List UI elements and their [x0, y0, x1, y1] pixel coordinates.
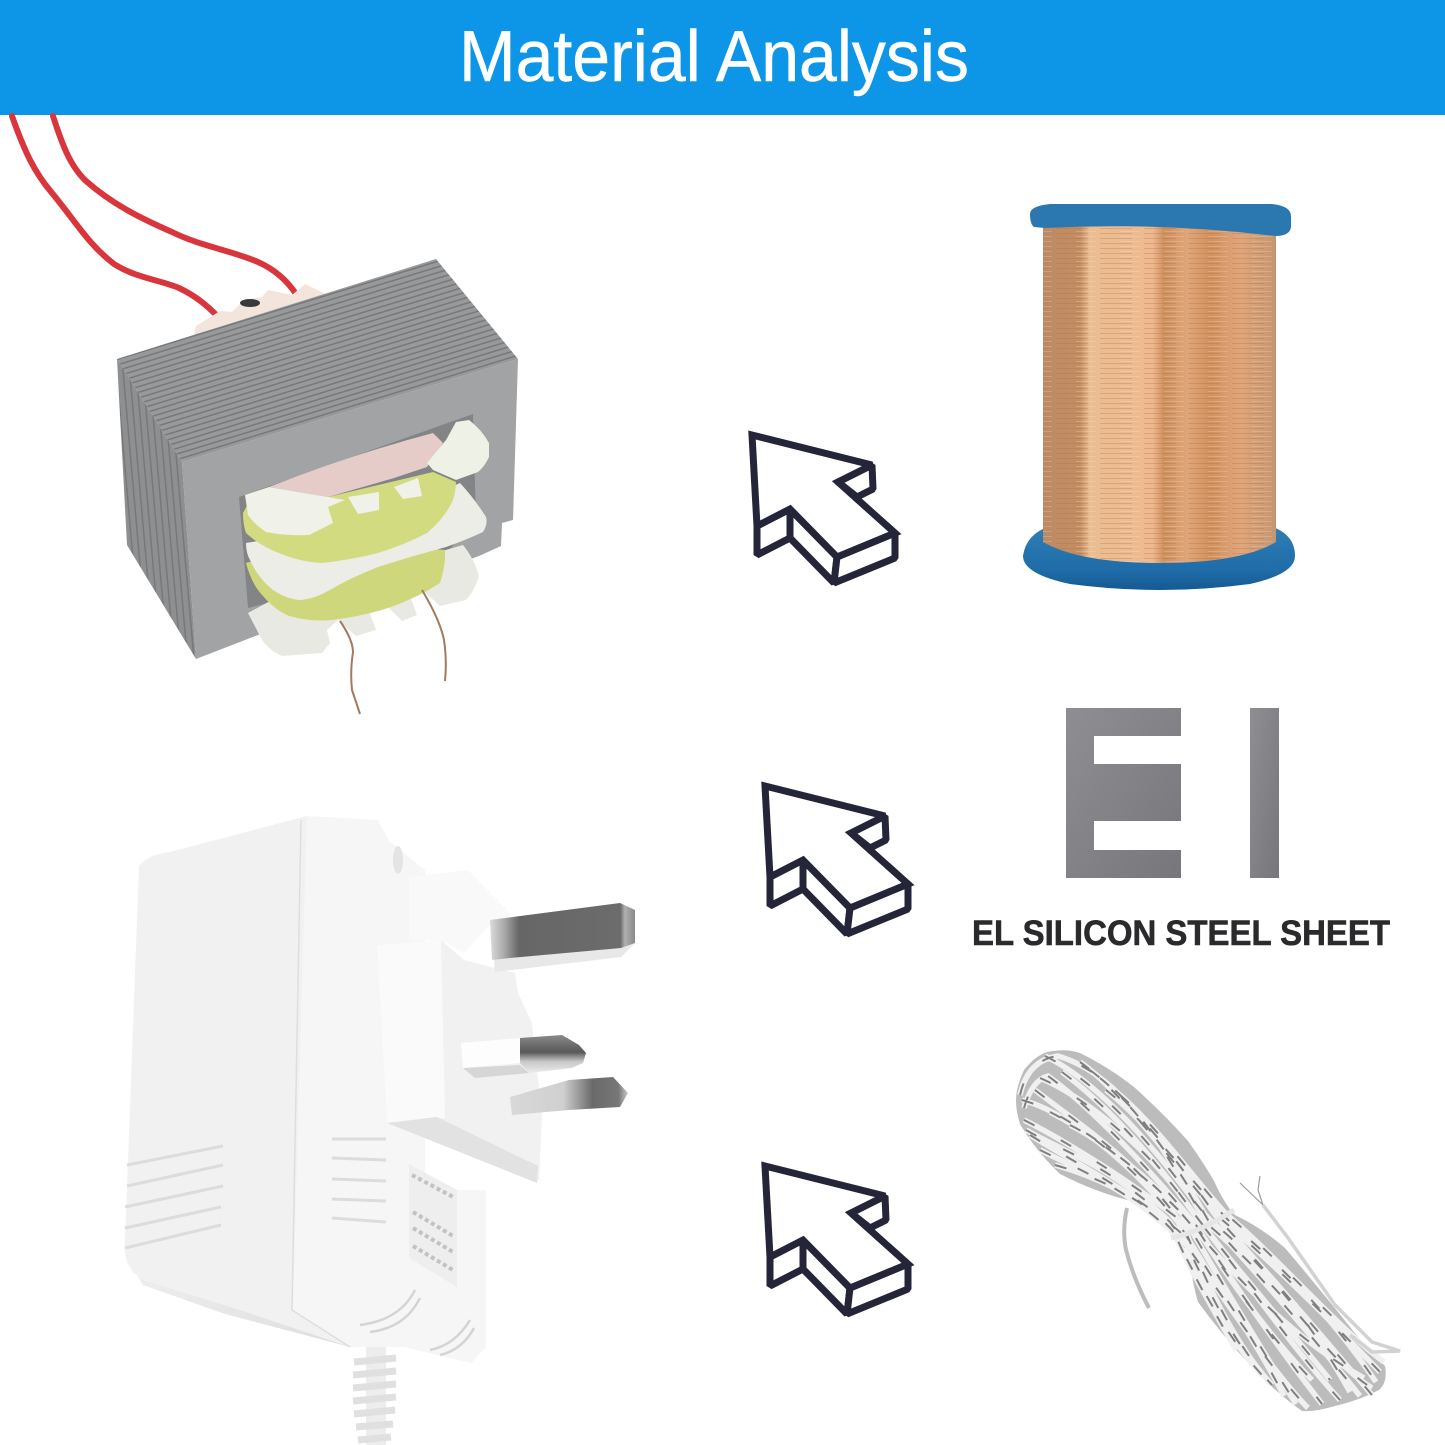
laminated core: front: [182, 359, 518, 659]
stripped conductors: [1240, 1176, 1263, 1205]
large earth blade: [490, 903, 635, 972]
top mounting tabs: [193, 284, 330, 350]
live pin: [461, 1035, 586, 1078]
bundle silhouette: [1016, 1050, 1386, 1411]
upper bobbin flange: right wing: [427, 420, 489, 480]
rating label: [409, 1164, 457, 1287]
bottom face: [125, 1255, 350, 1347]
upper coil: [243, 472, 456, 563]
title banner: [0, 0, 1445, 115]
upper bobbin flange: notch tabs: [348, 492, 379, 514]
rear screw recess: [393, 846, 403, 874]
top flange: [1030, 204, 1291, 236]
copper winding: [1043, 226, 1276, 563]
core window: [239, 414, 476, 608]
bottom bobbin flange: [248, 545, 479, 656]
arrow: wire into adapter: [765, 1166, 908, 1314]
pink primary winding: [269, 433, 443, 497]
heading: Material Analysis: Material Analysis: [459, 17, 969, 97]
seam: [292, 820, 350, 1347]
laminated core: top: [117, 259, 518, 462]
photo: bundle of white wire: [1016, 1050, 1400, 1411]
EI silicon steel sheet panel: [972, 708, 1390, 953]
wire core dashes: [1020, 1056, 1384, 1408]
laminated core: side: [117, 359, 196, 659]
lower coil: [246, 540, 445, 620]
cable tie: [1171, 1210, 1234, 1238]
red lead wires: [12, 116, 296, 317]
left vent ribs: [125, 1146, 223, 1248]
photo: transformer: [12, 116, 518, 714]
neutral pin: [510, 1077, 628, 1115]
fine copper leads: [340, 590, 446, 714]
base vent ribs: [360, 1290, 474, 1355]
lower plug block: [377, 940, 542, 1183]
bottom flange: [1023, 526, 1295, 590]
upper plug block: [409, 870, 512, 953]
centre vent ribs: [332, 1139, 386, 1222]
loose end left: [1124, 1208, 1149, 1308]
arrow: steel sheet into transformer: [765, 786, 908, 934]
strain relief cord: [353, 1347, 396, 1445]
right face: [293, 816, 486, 1363]
I sheet: [1250, 708, 1279, 878]
E sheet: [1066, 708, 1181, 878]
loose end right: [1263, 1205, 1400, 1352]
label: EL SILICON STEEL SHEET: [972, 914, 1390, 953]
left face: [125, 816, 350, 1347]
arrow: copper wire into transformer: [752, 435, 895, 583]
upper bobbin flange: left part: [245, 487, 345, 535]
middle bobbin flange: [246, 483, 487, 600]
photo: white power adapter: [125, 816, 635, 1445]
photo: copper wire spool: [1023, 204, 1295, 590]
wire strands: [1020, 1056, 1384, 1408]
